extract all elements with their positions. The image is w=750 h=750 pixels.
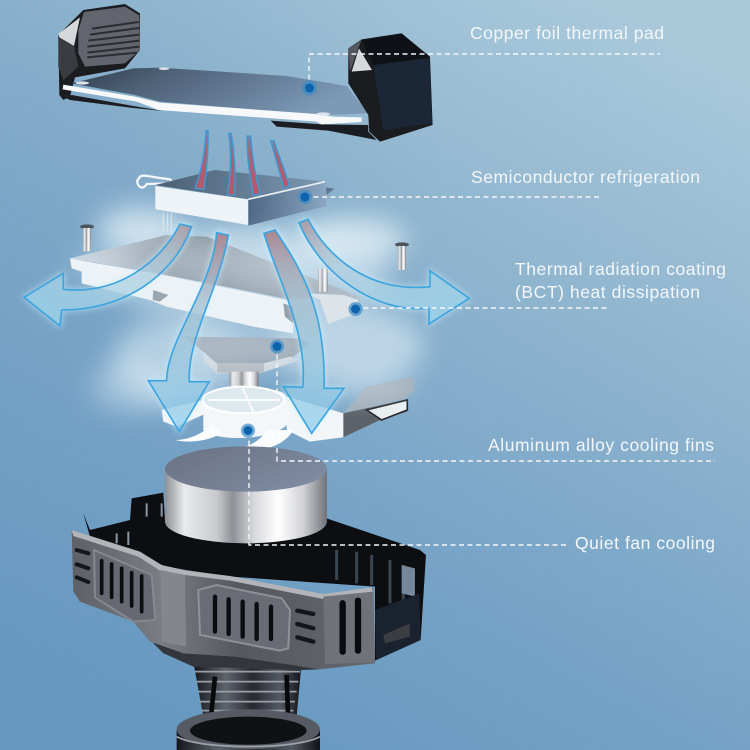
label: aluminum alloy cooling fins: Aluminum alloy cooling fins [488, 435, 714, 455]
label: copper foil thermal pad: Copper foil thermal pad [470, 23, 664, 43]
airflow arrows [24, 219, 469, 433]
thermal plate [63, 67, 377, 140]
screw centre [318, 268, 328, 292]
marker dots [241, 80, 362, 438]
arrow: down right [264, 230, 344, 433]
threaded neck [193, 662, 302, 727]
right lower connector block [287, 377, 415, 442]
arrow: left [24, 224, 192, 326]
housing gray band [72, 530, 375, 669]
right clamp jaw [348, 33, 433, 142]
lower collar [177, 709, 320, 750]
upward heat stripes [195, 131, 289, 195]
smoke cloud [90, 207, 423, 413]
label: thermal radiation coating: Thermal radiation coating [515, 259, 726, 279]
screw right [395, 242, 409, 270]
screw left [80, 224, 94, 251]
fan cooling motor housing [72, 446, 426, 750]
label: thermal radiation coating [515, 259, 726, 302]
aluminum spreader plate with screws [70, 224, 409, 333]
arrow: right [299, 219, 469, 324]
left clamp jaw [58, 4, 140, 100]
smoke overlay [70, 237, 413, 400]
housing underside [147, 637, 320, 670]
leader lines [249, 54, 715, 545]
right vent panel [198, 585, 358, 652]
arrow: down left [148, 233, 228, 432]
silver fan motor cylinder [165, 446, 327, 543]
white fan [162, 387, 293, 451]
label: thermal radiation coating: (BCT) heat dissipation [515, 282, 700, 302]
housing interior [83, 493, 426, 661]
label: semiconductor refrigeration: Semiconductor refrigeration [471, 167, 700, 187]
left vent panel [77, 550, 155, 622]
aluminum alloy cooling fins hub [185, 337, 310, 388]
phone clamp with copper foil thermal pad [58, 4, 433, 142]
semiconductor refrigeration block [137, 170, 334, 232]
label: quiet fan cooling: Quiet fan cooling [575, 533, 715, 553]
